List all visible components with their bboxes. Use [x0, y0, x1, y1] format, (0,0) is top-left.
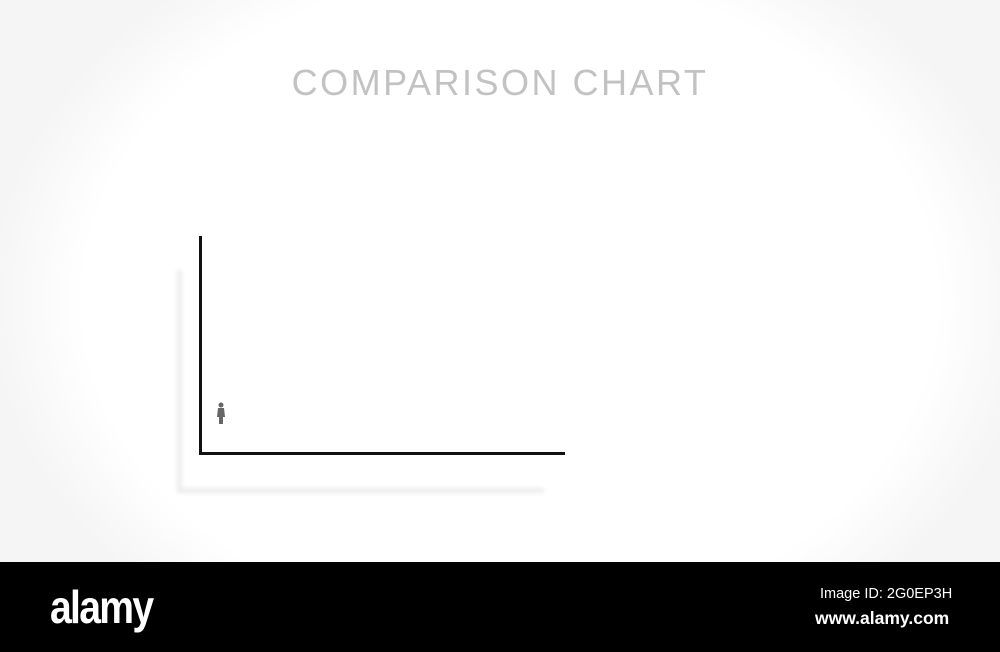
image id: Image ID: 2G0EP3H	[820, 586, 952, 602]
y axis and x axis	[199, 236, 565, 455]
logo: alamy	[50, 581, 152, 633]
footer	[0, 562, 1000, 652]
chart	[176, 236, 565, 494]
axis shadow	[177, 270, 544, 493]
url: www.alamy.com	[815, 608, 949, 628]
title: COMPARISON CHART	[292, 62, 708, 103]
icon: person	[217, 402, 225, 424]
